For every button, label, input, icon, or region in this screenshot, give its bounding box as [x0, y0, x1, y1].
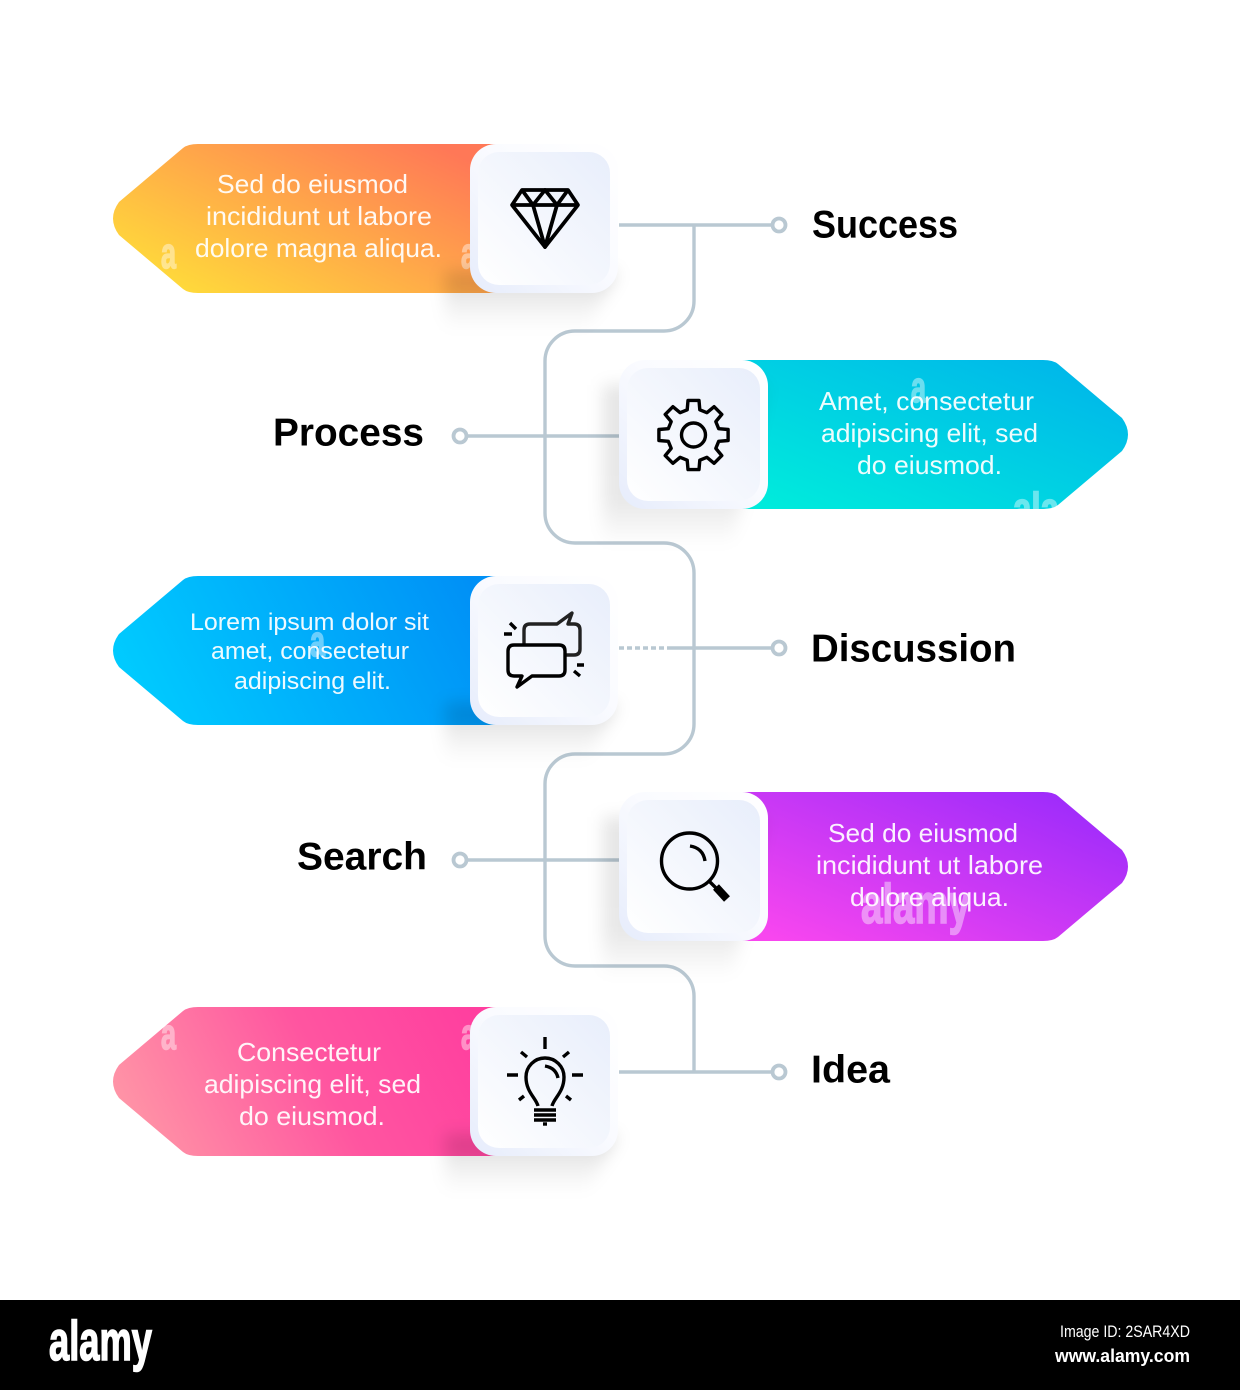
watermark: alamy — [861, 872, 970, 935]
arrow shape: orange — [113, 144, 500, 293]
connector lines — [467, 225, 772, 1072]
watermark fragments: a — [911, 363, 926, 412]
text: discussion description: adipiscing elit. — [234, 668, 391, 695]
text: idea description — [204, 1037, 421, 1131]
text: success description: Sed do eiusmod — [217, 169, 408, 199]
panel: process arrow — [742, 360, 1128, 509]
label: Idea: Idea — [811, 1048, 890, 1092]
arrow shape: pink — [113, 1007, 500, 1156]
text: success description: dolore magna aliqua. — [195, 233, 442, 263]
watermark fragments — [911, 378, 1058, 509]
text: search description: dolore aliqua. — [850, 882, 1009, 912]
text: discussion description — [190, 609, 429, 695]
watermark fragments: a — [161, 1010, 176, 1059]
watermark fragments — [161, 1010, 476, 1059]
text: discussion description: Lorem ipsum dolor sit — [190, 609, 429, 636]
arrow shape: teal — [740, 360, 1128, 509]
icon: diamond — [512, 190, 578, 247]
text: process description: adipiscing elit, sed — [821, 418, 1038, 448]
arrow shape: purple — [740, 792, 1128, 941]
text: search description — [816, 818, 1043, 912]
card: bulb — [470, 1007, 618, 1156]
text: idea description: do eiusmod. — [239, 1101, 385, 1131]
text: idea description: adipiscing elit, sed — [204, 1069, 421, 1099]
text: success description — [195, 169, 442, 263]
footer url: www.alamy.com — [1054, 1346, 1190, 1366]
text: success description: incididunt ut labore — [206, 201, 432, 231]
card: gear — [619, 360, 768, 509]
icon: magnifier — [662, 833, 727, 899]
card: chat — [470, 576, 618, 725]
text: discussion description: amet, consectetur — [211, 638, 409, 665]
icon: gear — [659, 400, 728, 470]
icon: chat bubbles — [504, 613, 584, 687]
panel: discussion arrow — [113, 576, 500, 725]
panel: search arrow — [740, 792, 1128, 941]
footer logo: alamy — [49, 1309, 152, 1372]
label: Success: Success — [812, 204, 958, 246]
text: process description: Amet, consectetur — [819, 386, 1034, 416]
watermark fragments: a — [461, 229, 476, 278]
text: search description: Sed do eiusmod — [828, 818, 1018, 848]
connector dots — [454, 218, 786, 1078]
arrow shape: blue — [113, 576, 500, 725]
icon: light bulb — [507, 1037, 583, 1124]
panel: success arrow — [113, 144, 500, 293]
label: Process: Process — [273, 412, 424, 454]
label: Discussion: Discussion — [811, 628, 1016, 670]
watermark fragments: a — [161, 229, 176, 278]
watermark fragments: ala — [1013, 484, 1059, 533]
watermark fragment: a — [310, 617, 325, 666]
text: search description: incididunt ut labore — [816, 850, 1043, 880]
footer banner — [0, 1300, 1240, 1390]
text: process description: do eiusmod. — [857, 450, 1002, 480]
card shadows — [445, 272, 766, 1193]
watermark fragments — [161, 229, 476, 278]
card: diamond — [470, 144, 618, 293]
watermark fragments: a — [461, 1010, 476, 1059]
text: process description — [819, 386, 1038, 480]
card: search — [619, 792, 768, 941]
footer image id: Image ID: 2SAR4XD — [1060, 1322, 1190, 1341]
label: Search: Search — [297, 836, 427, 878]
text: idea description: Consectetur — [237, 1037, 381, 1067]
panel: idea arrow — [113, 1007, 500, 1156]
